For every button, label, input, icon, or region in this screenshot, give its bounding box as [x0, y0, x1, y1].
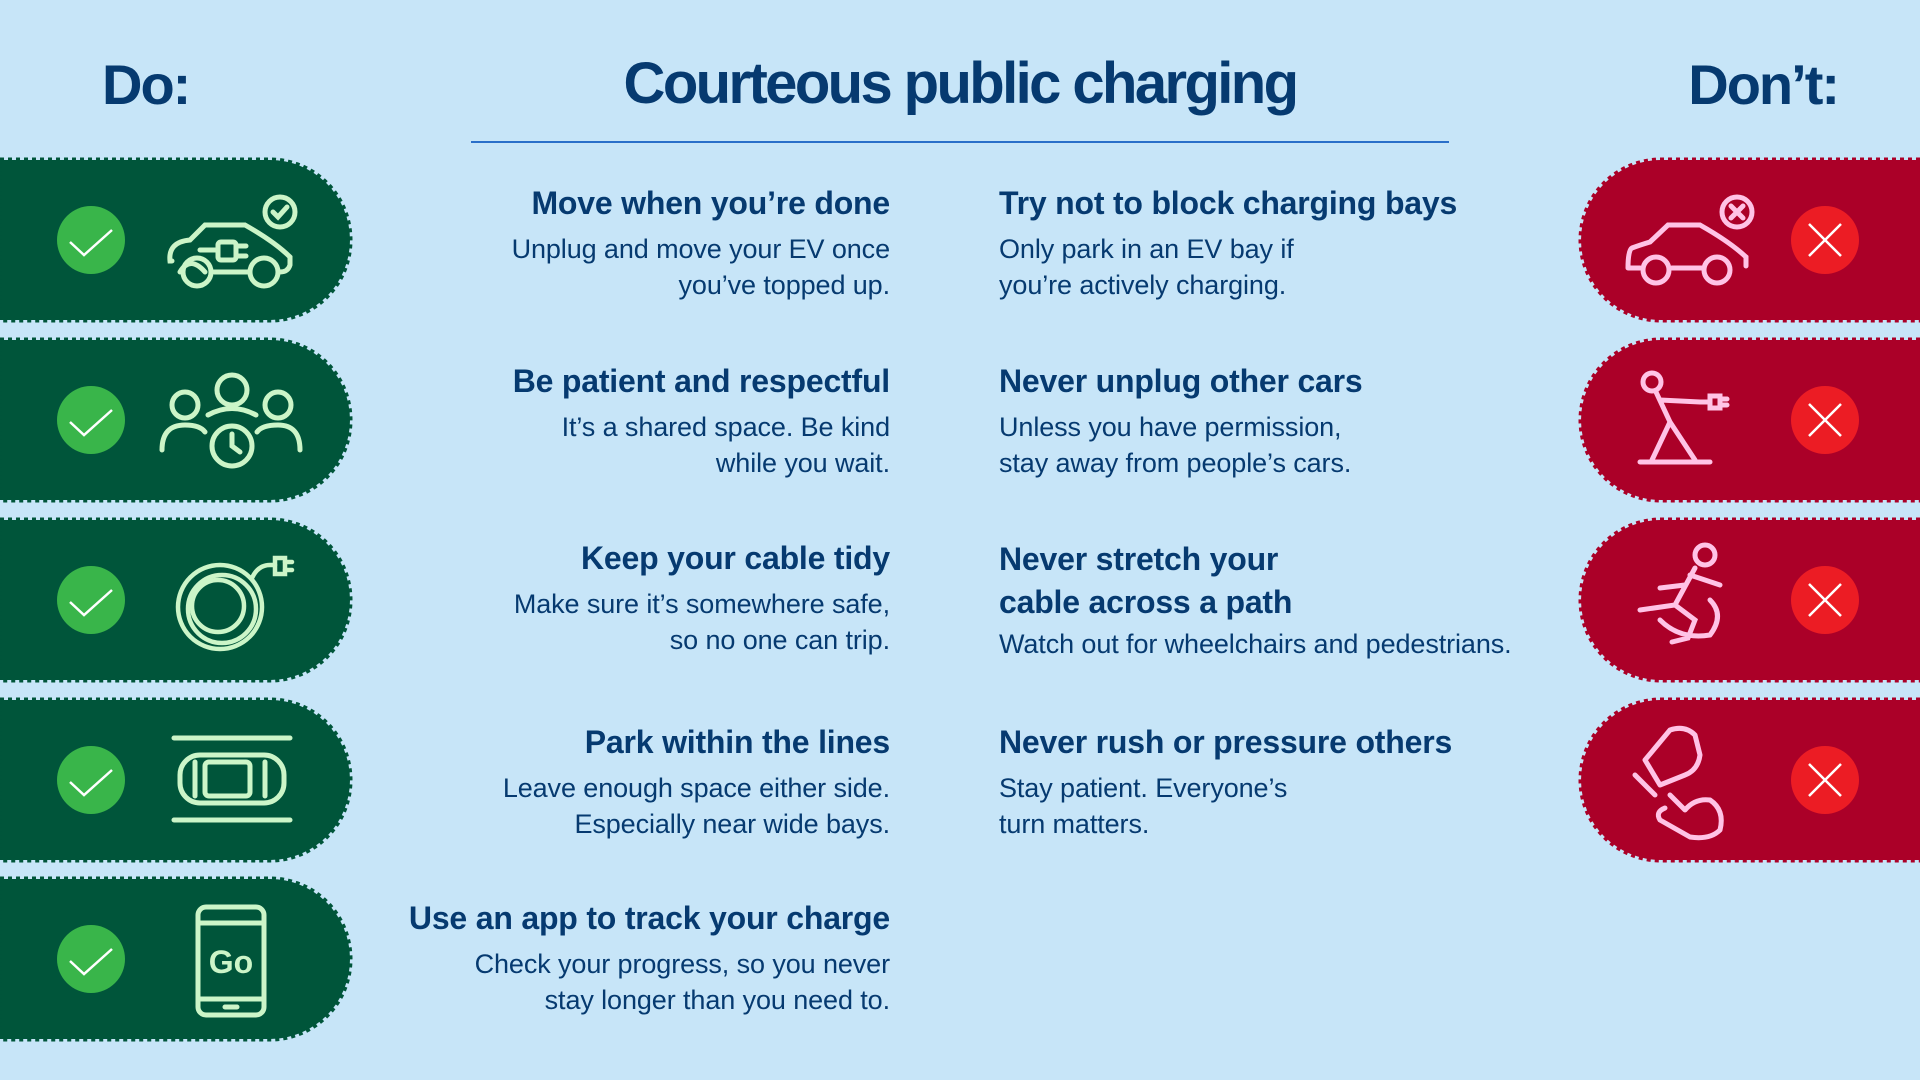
text: park within lines: Leave enough space either side. — [503, 773, 890, 803]
text: never stretch: Watch out for wheelchairs and pedestrians. — [999, 629, 1512, 659]
heading: Do: Do: — [102, 53, 189, 116]
icon: phone go: Go — [209, 944, 253, 980]
panel: dont 2 unplug — [1581, 340, 1920, 500]
title: Courteous public charging — [624, 51, 1296, 116]
text: park within lines — [503, 724, 890, 839]
text: move when done: you’ve topped up. — [679, 270, 890, 300]
icon: tripping person — [1640, 545, 1720, 642]
panel: do 1 move when done — [0, 160, 350, 320]
text: never rush: Never rush or pressure others — [999, 724, 1452, 760]
text: park within lines: Park within the lines — [585, 724, 890, 760]
text: move when done: Move when you’re done — [531, 185, 890, 221]
text: try not to block: you’re actively charging. — [999, 270, 1286, 300]
panel: do 5 app — [0, 879, 350, 1039]
icon: ev car plug — [170, 197, 295, 286]
text: use an app: Use an app to track your charge — [409, 900, 890, 936]
panel: dont 1 block bays — [1581, 160, 1920, 320]
text: try not to block — [999, 185, 1457, 300]
text: never stretch: Never stretch your — [999, 541, 1278, 577]
text: be patient — [513, 363, 890, 478]
text: be patient: It’s a shared space. Be kind — [562, 412, 890, 442]
text: never unplug: Unless you have permission, — [999, 412, 1341, 442]
text: be patient: Be patient and respectful — [513, 363, 890, 399]
panel: dont 4 rush — [1581, 700, 1920, 860]
text: cable tidy: Make sure it’s somewhere safe, — [514, 589, 890, 619]
text: use an app — [409, 900, 890, 1015]
text: use an app: Check your progress, so you never — [475, 949, 890, 979]
text: move when done — [512, 185, 890, 300]
heading: Don't: Don’t: — [1688, 53, 1838, 116]
icon: fist and pointing hand — [1635, 728, 1721, 838]
dont panels — [1578, 158, 1920, 862]
text: never stretch — [999, 541, 1512, 659]
text: move when done: Unplug and move your EV once — [512, 234, 890, 264]
icon: person pulling plug — [1640, 373, 1727, 462]
text: try not to block: Try not to block charging bays — [999, 185, 1457, 221]
text: never unplug — [999, 363, 1362, 478]
text: never unplug: Never unplug other cars — [999, 363, 1362, 399]
icon: phone go — [198, 907, 264, 1015]
panel: dont 3 trip — [1581, 520, 1920, 680]
panel: do 3 cable — [0, 520, 350, 680]
text: cable tidy: so no one can trip. — [670, 625, 890, 655]
text: never unplug: stay away from people’s cars. — [999, 448, 1351, 478]
text: be patient: while you wait. — [716, 448, 890, 478]
icon: cable coil — [178, 558, 292, 649]
do panels — [0, 158, 352, 1042]
text: cable tidy: Keep your cable tidy — [581, 540, 890, 576]
text: never rush: turn matters. — [999, 809, 1149, 839]
text: never rush — [999, 724, 1452, 839]
icon: people clock — [162, 375, 300, 466]
text: try not to block: Only park in an EV bay if — [999, 234, 1294, 264]
text: park within lines: Especially near wide bays. — [574, 809, 890, 839]
text: cable tidy — [514, 540, 890, 655]
icon: car with x — [1628, 197, 1752, 283]
panel: do 4 park — [0, 700, 350, 860]
text: never stretch: cable across a path — [999, 584, 1292, 620]
text: use an app: stay longer than you need to. — [545, 985, 890, 1015]
icon: car top view in lines — [174, 738, 290, 820]
text: never rush: Stay patient. Everyone’s — [999, 773, 1287, 803]
panel: do 2 patient — [0, 340, 350, 500]
